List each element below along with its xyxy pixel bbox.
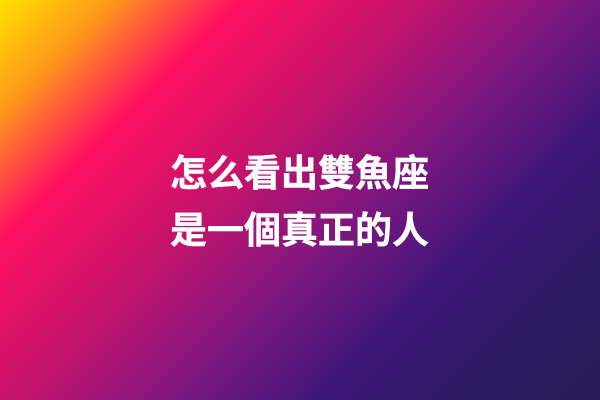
title line 1: 怎么看出雙魚座 — [170, 153, 429, 194]
title — [170, 153, 429, 251]
title line 2: 是一個真正的人 — [170, 210, 429, 251]
